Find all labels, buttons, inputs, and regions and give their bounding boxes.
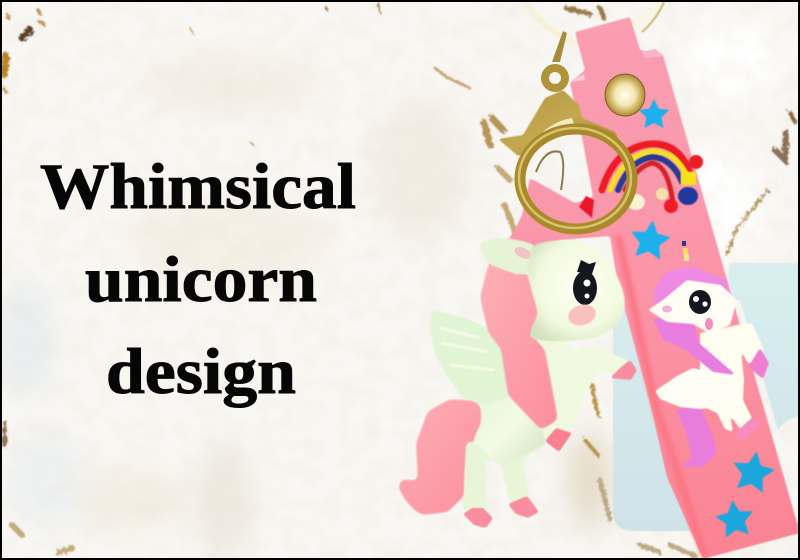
clasp body xyxy=(498,90,622,156)
front hooves xyxy=(610,360,637,380)
large 3D unicorn charm xyxy=(398,238,637,528)
rivet xyxy=(605,74,645,116)
pink strap with rainbow, stars and sticker unicorn xyxy=(488,17,800,559)
head xyxy=(526,240,625,341)
body xyxy=(473,390,546,466)
hooves xyxy=(733,418,760,440)
wing xyxy=(655,368,741,409)
head xyxy=(648,280,737,334)
icon: rainbow xyxy=(579,144,703,218)
mane xyxy=(653,318,736,375)
pink mane xyxy=(480,262,558,430)
hind hooves xyxy=(463,508,493,528)
chest and raised foreleg xyxy=(526,331,632,443)
tail xyxy=(398,399,485,515)
wing feather highlights xyxy=(440,328,495,370)
title text: Whimsical xyxy=(40,151,356,223)
tail xyxy=(676,405,717,467)
body xyxy=(700,323,764,432)
title text: design xyxy=(106,336,296,408)
ear xyxy=(478,238,542,275)
sticker unicorn xyxy=(648,241,769,467)
title text xyxy=(40,151,356,408)
ring xyxy=(520,129,632,229)
icon: blue stars xyxy=(628,99,777,539)
strap body xyxy=(488,17,800,559)
key ring loop xyxy=(525,2,664,44)
eye xyxy=(573,271,597,305)
wing xyxy=(430,309,513,406)
forelock xyxy=(653,266,729,304)
hind legs xyxy=(463,441,539,512)
title text: unicorn xyxy=(85,244,317,316)
light blue card behind strap xyxy=(613,263,800,531)
cheek xyxy=(566,302,598,328)
gold lobster clasp and ring xyxy=(498,31,632,229)
horn xyxy=(682,241,686,246)
